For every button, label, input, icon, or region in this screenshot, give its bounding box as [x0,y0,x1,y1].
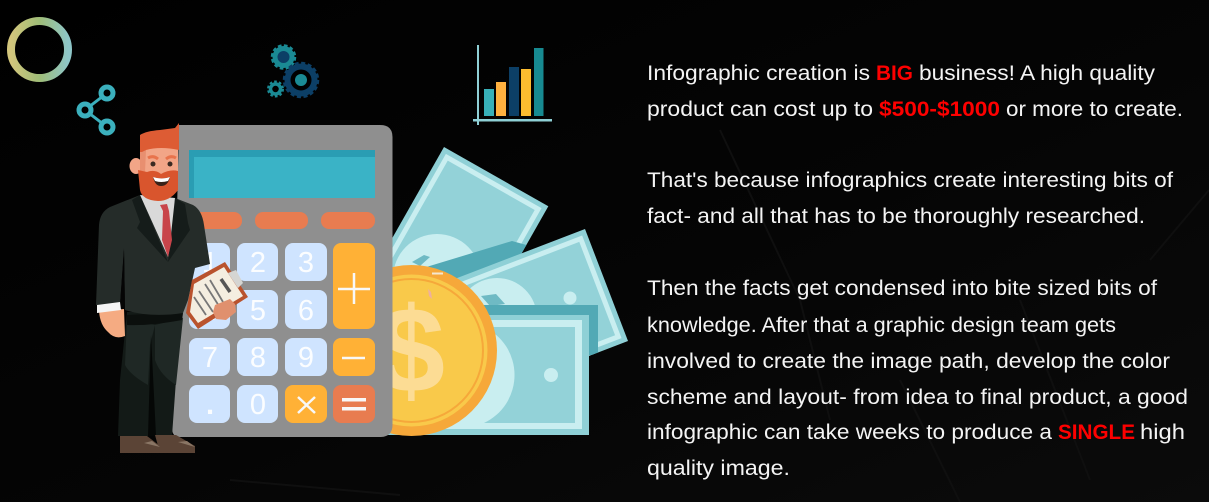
paragraph: cost: business! A high quality [919,62,1156,85]
paragraph: production [647,277,1188,480]
paragraph: research [647,169,1173,228]
calculator keypad: 3 [298,247,314,279]
paragraph: production: scheme and layout- from idea to final product, a good [647,386,1188,409]
banknote: front [385,315,589,435]
calculator keypad: . [206,389,214,421]
illustration: bearded businessman [96,123,248,453]
holding hand [213,299,236,320]
paragraph: production: high [1140,421,1185,444]
ear [130,158,142,174]
paragraph: cost: Infographic creation is [647,62,870,85]
paragraph: cost: $500-$1000 [879,98,1000,121]
text block [647,62,1188,480]
paragraph: production: quality image. [647,457,790,480]
paragraph: research: fact- and all that has to be thoroughly researched. [647,205,1145,228]
calculator function keys [190,212,375,229]
calculator keypad: 4 [202,295,218,327]
calculator keypad: 7 [202,342,218,374]
banknote: middle [457,229,628,356]
paragraph: production: SINGLE [1058,421,1135,444]
paragraph: cost: BIG [876,62,913,85]
paragraph: production: involved to create the image path, develop the color [647,350,1170,373]
icon: gradient ring [11,21,68,78]
illustration: banknotes [388,147,628,435]
calculator keypad: 2 [250,247,266,279]
bar chart icon [473,45,552,125]
shirt [140,195,175,257]
cuff [97,302,121,313]
calculator keypad: 6 [298,295,314,327]
calculator keypad: 8 [250,342,266,374]
paragraph: production: knowledge. After that a graphic design team gets [647,314,1116,337]
illustration: calculator [172,125,392,437]
paragraph: research: That's because infographics create interesting bits of [647,169,1173,192]
shoes [120,435,195,453]
calculator screen [189,150,375,198]
calculator keypad: 0 [250,389,266,421]
calculator keypad: 5 [250,295,266,327]
paragraph: production: infographic can take weeks to produce a [647,421,1052,444]
tie [160,204,172,257]
jacket [96,195,210,315]
hair [140,123,179,152]
eyebrows and eyes [148,157,176,166]
illustration: gold coin: $ [377,282,445,418]
icon: gears [268,46,318,96]
calculator keypad [189,243,375,423]
lapels [132,195,190,262]
calculator keypad: 9 [298,342,314,374]
illustration: gold coin [326,265,497,436]
calculator keypad: 1 [202,247,218,279]
clipboard [186,262,248,329]
icon: share nodes [79,87,113,133]
beard [138,170,178,201]
face [140,148,178,178]
paragraph: cost: or more to create. [1006,98,1183,121]
paragraph: cost: product can cost up to [647,98,873,121]
hand [99,309,125,337]
smile [153,177,170,186]
banknote: back [392,147,548,278]
paragraph: cost [647,62,1183,121]
paragraph: production: Then the facts get condensed into bite sized bits of [647,277,1157,300]
trousers [118,312,183,436]
